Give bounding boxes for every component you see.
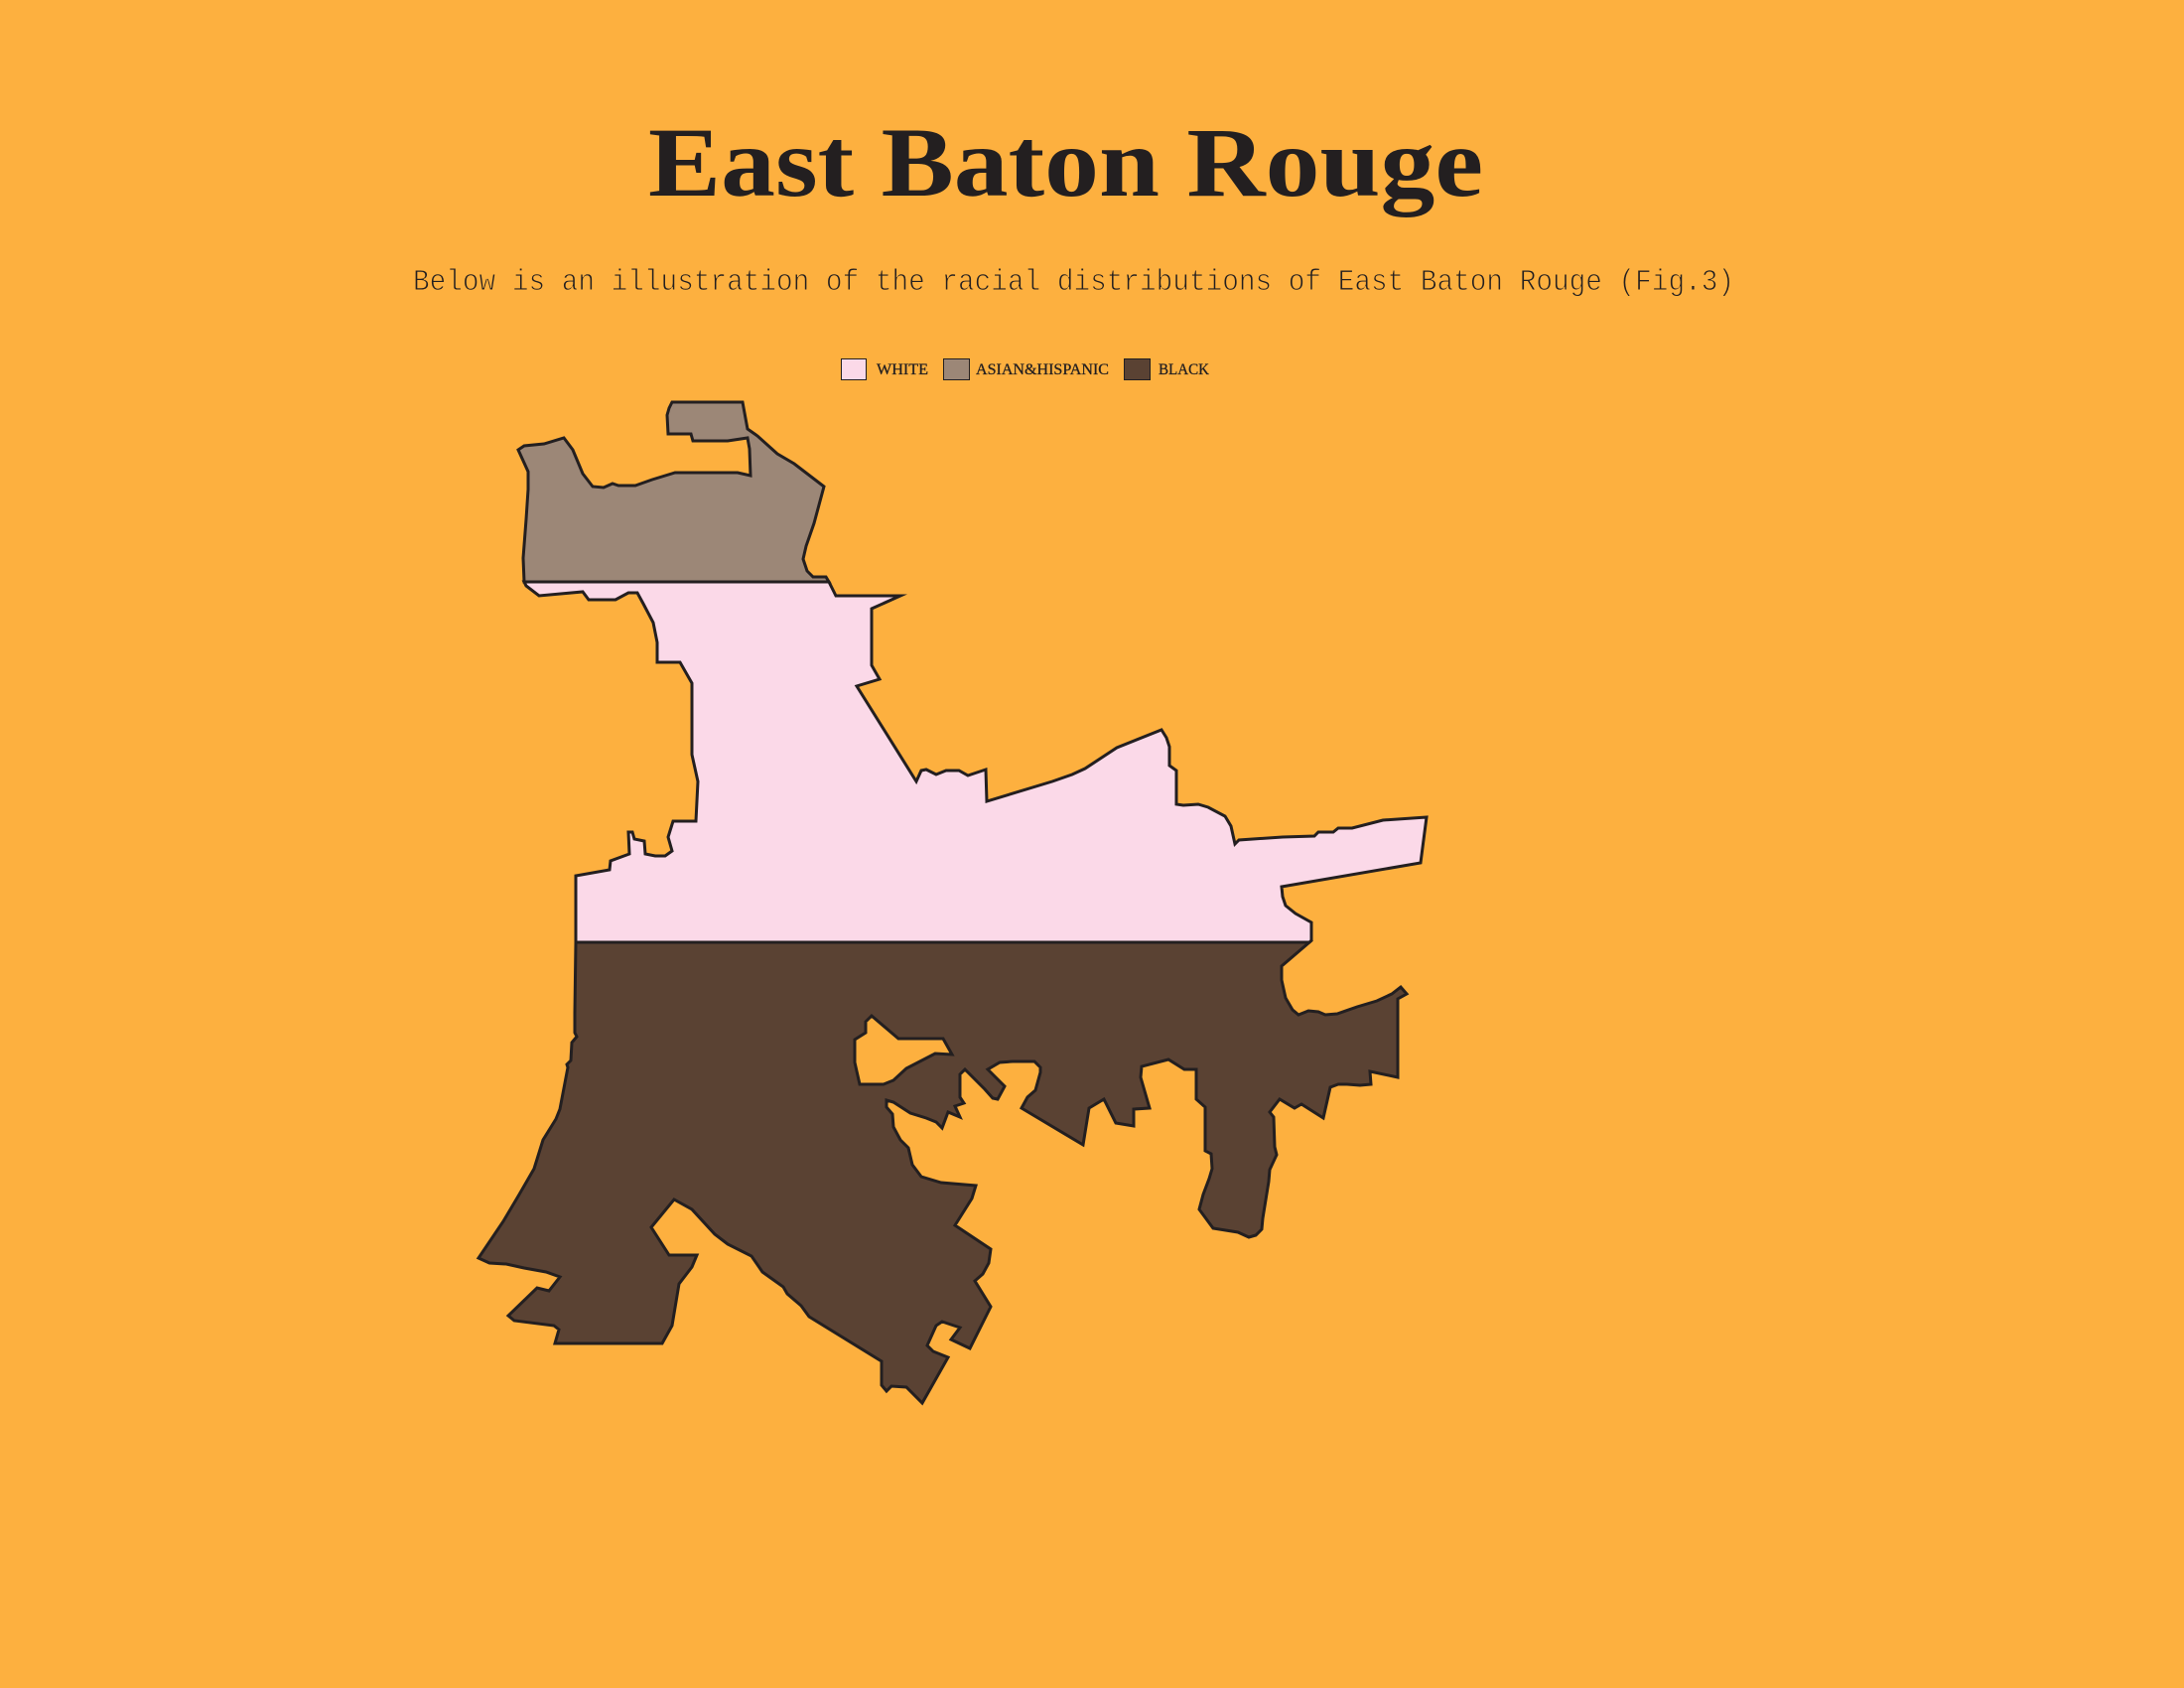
legend item: black <box>1124 359 1209 379</box>
legend item: black: BLACK <box>1159 361 1209 378</box>
title: East Baton Rouge <box>648 107 1483 217</box>
map region: white <box>524 582 1427 942</box>
legend item: white <box>842 359 928 379</box>
map of East Baton Rouge <box>478 402 1427 1403</box>
legend item: white: WHITE <box>877 361 928 378</box>
map region: black <box>478 942 1407 1403</box>
map region: asian and hispanic <box>518 402 829 582</box>
legend <box>842 359 1209 379</box>
subtitle: Below is an illustration of the racial distributions of East Baton Rouge (Fig.3) <box>413 265 1734 300</box>
legend item: asian and hispanic <box>943 359 1109 379</box>
legend item: asian and hispanic: ASIAN&HISPANIC <box>976 361 1109 378</box>
